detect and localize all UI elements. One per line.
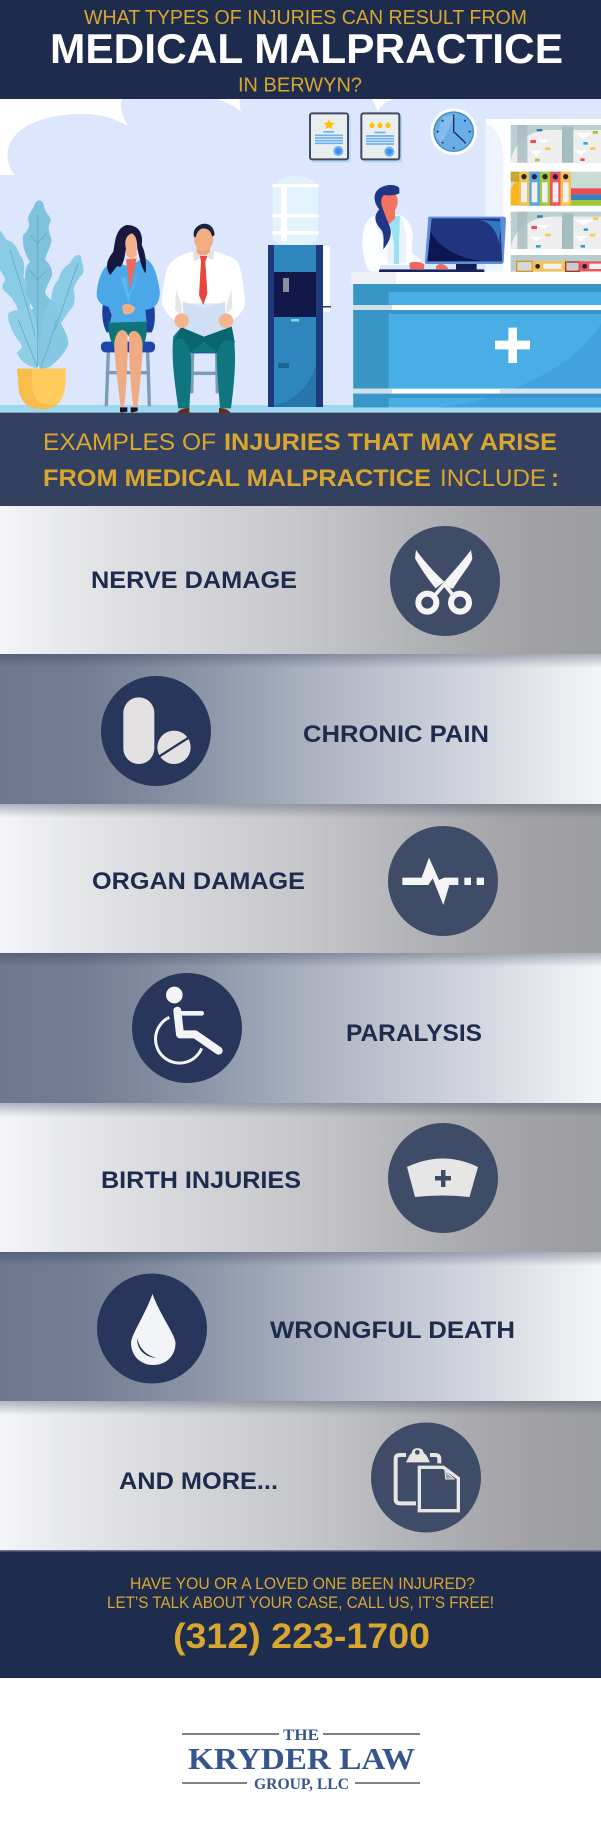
medical records shelf bbox=[486, 119, 601, 272]
title: medical malpractice: MEDICAL MALPRACTICE bbox=[50, 25, 563, 72]
icon: blood drop bbox=[97, 1274, 207, 1384]
icon: medical cross bbox=[495, 328, 530, 363]
sub-heading banner: INJURIES THAT MAY ARISE bbox=[224, 429, 557, 456]
call to action text: HAVE YOU OR A LOVED ONE BEEN INJURED? bbox=[130, 1575, 475, 1593]
icon: heartbeat line bbox=[388, 826, 498, 936]
certificate: one star bbox=[310, 113, 351, 163]
panel: nerve damage bbox=[0, 506, 601, 654]
sub-heading banner: INCLUDE bbox=[440, 465, 546, 492]
left part drawn in zoom coordinates bbox=[0, 200, 245, 413]
panel: wrongful death bbox=[0, 1252, 601, 1401]
heading line: what types of injuries: WHAT TYPES OF INJURIES CAN RESULT FROM bbox=[84, 7, 527, 29]
label: NERVE DAMAGE bbox=[91, 567, 297, 594]
label: BIRTH INJURIES bbox=[101, 1167, 301, 1194]
sub-heading banner bbox=[0, 413, 601, 506]
icon: scissors bbox=[390, 526, 500, 636]
certificate: three stars bbox=[361, 113, 402, 163]
icon: clipboard and document bbox=[371, 1422, 481, 1532]
icon: pills bbox=[101, 676, 211, 786]
sub-heading banner: : bbox=[551, 465, 559, 492]
label: ORGAN DAMAGE bbox=[92, 868, 305, 895]
panel: and more bbox=[0, 1401, 601, 1551]
illustration: medical office waiting room bbox=[0, 99, 601, 413]
sub-heading banner: FROM MEDICAL MALPRACTICE bbox=[43, 465, 431, 492]
header banner bbox=[0, 0, 601, 99]
reception desk bbox=[351, 272, 601, 407]
panel: chronic pain bbox=[0, 654, 601, 804]
logo: The Kryder Law Group: GROUP, LLC bbox=[254, 1776, 349, 1793]
label: AND MORE... bbox=[119, 1468, 278, 1495]
panel: birth injuries bbox=[0, 1103, 601, 1252]
panel: paralysis bbox=[0, 953, 601, 1103]
man seated reading paper bbox=[162, 224, 245, 413]
icon: potted plant bbox=[0, 200, 83, 409]
computer monitor and keyboard bbox=[379, 217, 506, 273]
footer call to action: LET’S TALK ABOUT YOUR CASE, CALL US, IT’S FREE! bbox=[107, 1594, 494, 1612]
doctor at the desk bbox=[362, 185, 448, 272]
heading line: in Berwyn: IN BERWYN? bbox=[238, 74, 362, 96]
logo: The Kryder Law Group bbox=[182, 1727, 420, 1793]
floor bbox=[0, 405, 601, 413]
wall clock bbox=[430, 108, 477, 155]
footer call to action bbox=[0, 1550, 601, 1678]
icon: nurse cap bbox=[388, 1123, 498, 1233]
sub-heading banner: EXAMPLES OF bbox=[43, 429, 216, 456]
logo: The Kryder Law Group: KRYDER LAW bbox=[188, 1741, 415, 1776]
logo: The Kryder Law Group: THE bbox=[283, 1727, 319, 1744]
label: CHRONIC PAIN bbox=[303, 721, 489, 748]
right part drawn in zoom coordinates bbox=[310, 108, 601, 407]
background clouds bbox=[0, 99, 393, 175]
icon: wheelchair bbox=[132, 973, 242, 1083]
water cooler bbox=[268, 176, 331, 407]
panel: organ damage bbox=[0, 804, 601, 953]
woman seated on chair bbox=[97, 225, 160, 413]
label: PARALYSIS bbox=[346, 1020, 482, 1047]
label: WRONGFUL DEATH bbox=[270, 1317, 515, 1344]
phone number: (312) 223-1700 bbox=[173, 1617, 430, 1656]
